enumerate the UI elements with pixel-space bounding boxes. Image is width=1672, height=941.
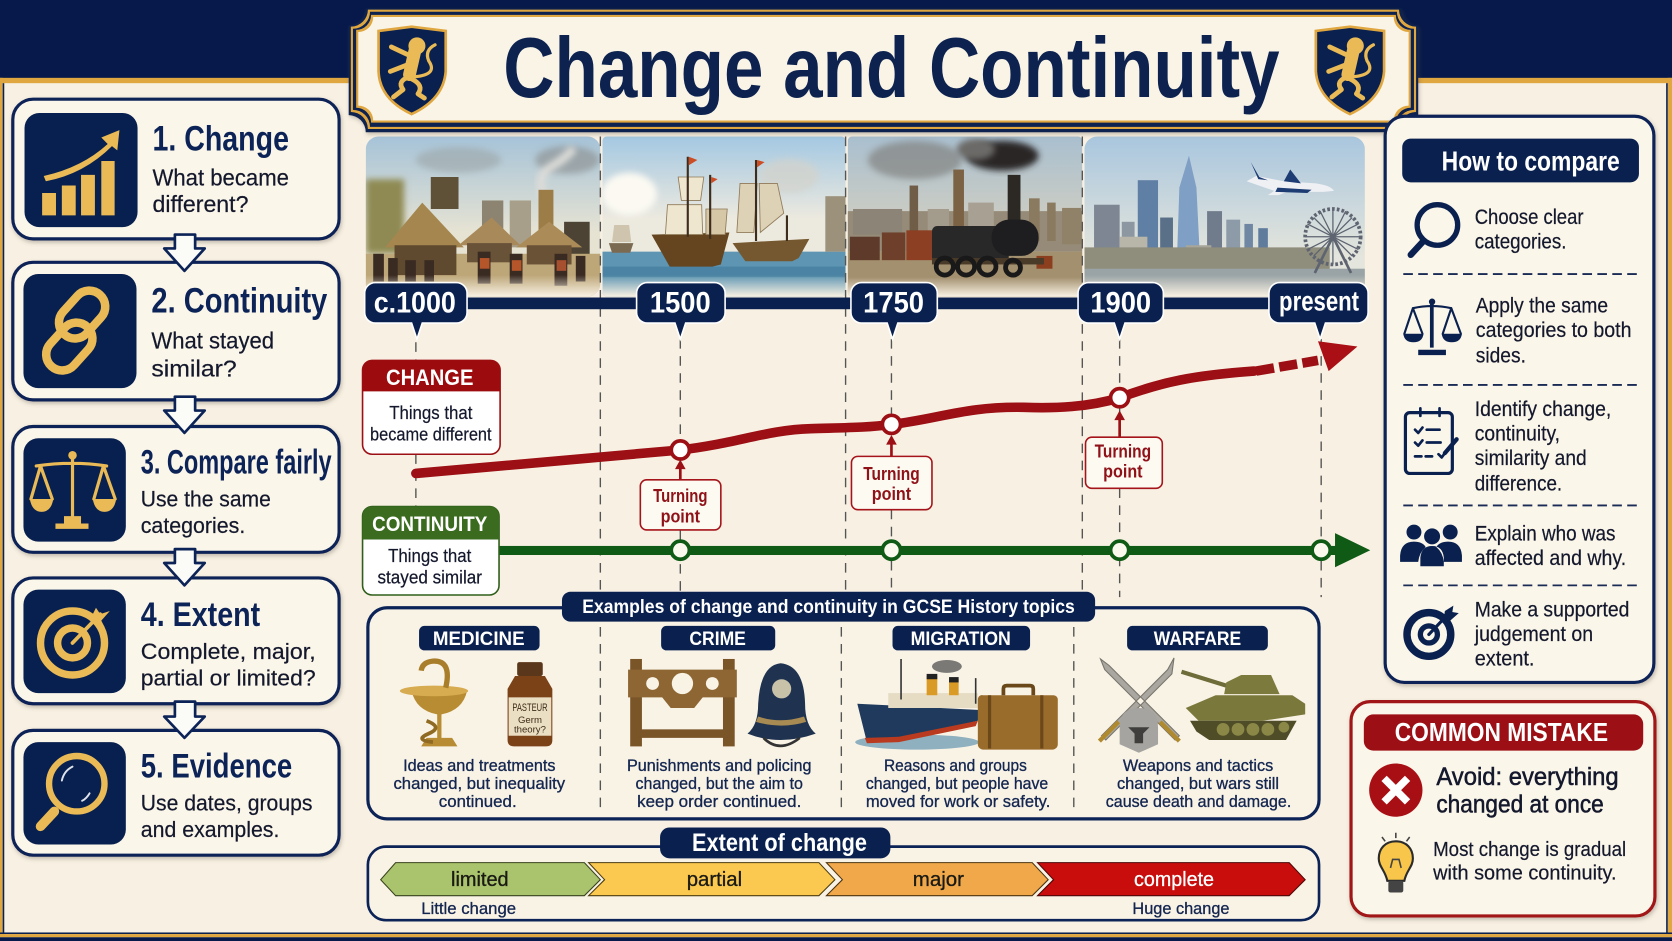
item: explain [1400,523,1626,570]
scale: complete [1038,863,1305,896]
item: explain: Explain who was [1475,523,1615,546]
item: same categories [1403,294,1631,368]
arrow: step 1 to 2 [164,235,205,271]
panel: step 2 continuity: similar? [151,355,237,381]
icon: gold scales [30,451,116,529]
icon: target [1407,606,1459,656]
panel: step 3 compare fairly: Use the same [141,486,271,511]
column: warfare [1099,626,1305,811]
heading: extent: Extent of change [692,830,867,857]
item: identify [1405,398,1611,495]
scale: limited [381,863,600,896]
item: judgement: Make a supported [1475,598,1629,621]
icon: gold target [41,608,110,675]
column: migration: MIGRATION [911,629,1011,650]
scale: partial [589,863,835,896]
callout: turning point 1500: point [661,505,700,526]
panel: step 5 evidence: 5. Evidence [141,747,292,785]
icon: checklist [1405,408,1457,473]
callout: turning point 1900: Turning [1095,440,1151,461]
panel: step 5 evidence: Use dates, groups [141,790,312,815]
panel: step 2 continuity: 2. Continuity [151,281,328,320]
item: choose categories: categories. [1475,230,1566,253]
column: migration: changed, but people have [866,774,1048,793]
callout: turning point 1900 [1086,411,1162,488]
column: medicine: MEDICINE [433,629,525,650]
column: crime: Punishments and policing [627,756,811,775]
date: 1900: 1900 [1090,286,1151,319]
date: c.1000 [365,283,467,339]
item: judgement: extent. [1475,647,1534,670]
column: migration: Reasons and groups [884,756,1027,775]
scale: complete: complete [1134,869,1214,891]
icon: tank [1181,672,1305,740]
column: crime: changed, but the aim to [636,774,803,793]
item: judgement [1407,598,1629,670]
icon: left crest [379,27,446,114]
column: medicine: changed, but inequality [393,774,566,793]
era dividers and date guides [416,136,1321,597]
callout: turning point 1500 [640,460,721,530]
icon: pasteur bottle: PASTEUR [512,702,548,714]
callout: turning point 1500: Turning [653,485,708,506]
panel: examples [368,592,1319,819]
column: warfare: WARFARE [1154,629,1241,650]
scale: partial: partial [687,869,742,891]
panel: step 1 change: different? [152,191,248,217]
panel: common mistake: Most change is gradual [1433,839,1626,861]
item: identify: similarity and [1475,447,1587,470]
icon: suitcase [978,686,1058,750]
panel: step 4 extent: partial or limited? [141,666,316,691]
panel: common mistake: changed at once [1436,792,1604,819]
panel: common mistake [1351,702,1655,916]
arrow: step 4 to 5 [164,702,205,738]
label: change: Things that [389,403,472,423]
icon: scales [1403,299,1462,355]
heading: examples [562,592,1095,622]
label: continuity [363,506,499,595]
scale: limited: limited [451,869,509,891]
item: identify: continuity, [1475,422,1560,445]
scale: major [826,863,1048,896]
callout: turning point 1750: Turning [863,463,920,484]
date: 1750: 1750 [863,286,924,319]
date: 1500: 1500 [650,286,711,319]
panel: extent of change: Huge change [1132,899,1229,918]
icon: pasteur bottle: Germ [518,715,542,726]
panel: step 5 evidence: and examples. [141,817,279,842]
column: warfare: changed, but wars still [1117,774,1279,793]
icon: rising bars and arrow [42,130,119,215]
item: same categories: sides. [1476,345,1526,368]
panel: step 3 compare fairly: 3. Compare fairly [141,443,332,481]
column: warfare: Weapons and tactics [1123,756,1273,775]
icon: gold magnifier [41,756,104,826]
image: modern city present [1084,136,1365,296]
item: identify: difference. [1475,472,1562,495]
column: crime: CRIME [689,629,746,650]
panel: step 4 extent: 4. Extent [141,596,260,634]
icon: pasteur bottle: theory? [514,725,546,736]
panel: step 5 evidence [13,730,339,855]
panel: how to compare [1385,116,1654,682]
column: warfare: cause death and damage. [1106,792,1291,811]
column: medicine [393,626,566,811]
icon: pasteur bottle [508,662,552,746]
panel: step 4 extent: Complete, major, [141,639,316,664]
panel: common mistake: Avoid: everything [1436,764,1619,791]
panel: step 1 change: What became [152,165,289,191]
date: 1500 [637,283,725,339]
image: industrial train 1750 [848,136,1082,296]
panel: step 3 compare fairly: categories. [141,513,245,538]
label: change: became different [370,424,492,444]
panel: step 3 compare fairly [13,427,339,552]
item: choose categories [1411,205,1584,255]
icon: crossed swords and helmet [1099,658,1179,753]
item: same categories: Apply the same [1476,294,1608,317]
label: change: CHANGE [386,365,474,390]
date: c.1000: c.1000 [374,286,456,319]
item: judgement: judgement on [1474,623,1593,646]
icon: people [1400,525,1462,566]
callout: turning point 1900: point [1103,461,1143,482]
panel: step 1 change [13,99,339,239]
label: continuity: stayed similar [377,567,482,587]
column: migration: moved for work or safety. [866,792,1050,811]
date: present [1269,283,1368,339]
panel: step 1 change: 1. Change [152,119,289,158]
heading: examples: Examples of change and continuity in GCSE History topics [582,596,1075,618]
panel: step 2 continuity: What stayed [151,328,274,354]
title plaque [349,9,1418,132]
column: crime [627,626,816,811]
panel: step 2 continuity [13,262,339,400]
title: Change and Continuity [503,21,1280,116]
image: medieval village c.1000 [366,136,600,296]
item: choose categories: Choose clear [1475,206,1584,229]
icon: steamship [855,659,982,750]
icon: chain link [40,284,112,377]
callout: turning point 1750 [851,435,932,510]
heading: common mistake [1364,714,1643,751]
heading: common mistake: COMMON MISTAKE [1395,719,1608,747]
date: 1900 [1078,283,1163,339]
heading: how to compare [1402,139,1639,182]
icon: stocks [628,659,737,746]
timeline bar [365,283,1368,339]
chart: change line [416,341,1357,473]
callout: turning point 1750: point [872,483,911,504]
panel: extent of change [368,827,1319,920]
icon: red cross [1369,763,1422,817]
icon: police helmet [747,663,816,746]
date: present: present [1279,285,1359,316]
column: migration [855,626,1058,811]
item: same categories: categories to both [1476,319,1631,342]
icon: light bulb [1379,833,1413,892]
arrow: step 3 to 4 [164,549,205,585]
arrow: step 2 to 3 [164,397,205,433]
panel: step 4 extent [13,578,339,704]
heading: how to compare: How to compare [1442,146,1620,177]
item: explain: affected and why. [1475,547,1626,570]
column: medicine: continued. [439,792,517,811]
date: 1750 [851,283,937,339]
label: continuity: CONTINUITY [372,512,487,536]
chart: continuity line [499,533,1370,567]
label: continuity: Things that [388,546,471,566]
column: crime: keep order continued. [637,792,801,811]
item: identify: Identify change, [1475,398,1611,421]
panel: common mistake: with some continuity. [1432,863,1617,885]
image: sailing ships 1500 [601,136,846,296]
icon: magnifier [1411,205,1458,255]
panel: extent of change: Little change [421,899,516,918]
column: medicine: Ideas and treatments [403,756,556,775]
label: change [363,360,500,454]
icon: right crest [1316,27,1384,114]
icon: bowl of hygieia [400,661,468,746]
scale: major: major [913,869,964,891]
